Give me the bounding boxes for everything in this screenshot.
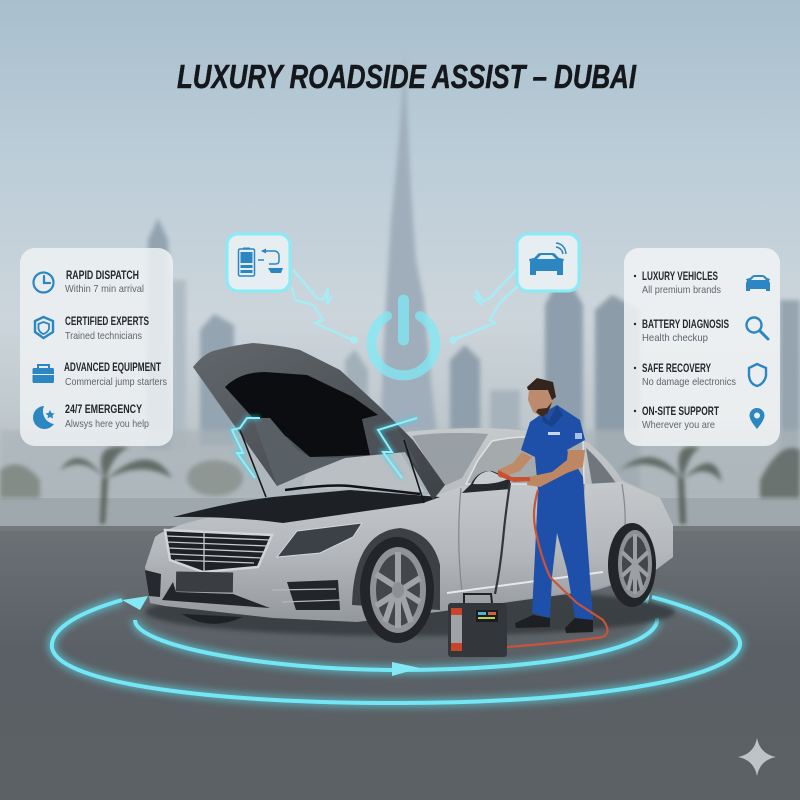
- technician: left shoe: [515, 615, 550, 628]
- technician: [498, 378, 593, 633]
- item: advanced equipment: [64, 360, 167, 388]
- item: emergency: [65, 402, 149, 430]
- car: windshield behind hood: [300, 452, 425, 492]
- glowing ring: inner track: [135, 618, 657, 670]
- car: side trim: [447, 572, 603, 593]
- icon: map pin: [750, 408, 765, 429]
- car: rear side window: [586, 448, 616, 484]
- car: body lower panel: [145, 482, 673, 622]
- lightning connector: left: [292, 270, 356, 342]
- title: LUXURY ROADSIDE ASSIST – DUBAI: [177, 58, 637, 95]
- item: certified experts: Trained technicians: [65, 330, 142, 342]
- car: grille: [165, 530, 272, 572]
- icon: magnifier: [746, 318, 768, 339]
- technician: sleeve badge: [575, 433, 582, 439]
- car: front side window: [466, 437, 584, 484]
- car: door seams: [459, 484, 625, 592]
- item: certified experts: [65, 314, 149, 342]
- technician: clamps: [498, 470, 530, 482]
- item: on-site support: [642, 404, 719, 431]
- item: luxury vehicles: All premium brands: [642, 284, 721, 296]
- icon: shield: [749, 364, 766, 386]
- hood: insulation right: [362, 419, 420, 470]
- hood: dark inner panel: [225, 372, 378, 457]
- car: open hood: [193, 343, 445, 503]
- car: rear wheel: [608, 523, 656, 607]
- item: luxury vehicles: [642, 269, 721, 296]
- technician: hair: [527, 378, 556, 400]
- car: front underside: [182, 614, 243, 624]
- item: advanced equipment: ADVANCED EQUIPMENT: [64, 360, 161, 374]
- technician: right shoe: [565, 618, 593, 633]
- bullets: [634, 275, 636, 412]
- background: road: [0, 528, 800, 800]
- icon: connected car tile: [517, 234, 579, 291]
- lightning connector: right: [450, 270, 518, 342]
- item: rapid dispatch: RAPID DISPATCH: [66, 268, 139, 282]
- car: side mirror: [462, 471, 510, 493]
- jump starter: side stripe: [451, 608, 462, 650]
- background: water strip: [0, 498, 800, 528]
- item: emergency: 24/7 EMERGENCY: [65, 402, 142, 416]
- item: safe recovery: No damage electronics: [642, 376, 736, 388]
- item: safe recovery: [642, 361, 736, 388]
- car: front wheel: [352, 528, 440, 643]
- black jump cable: [495, 483, 510, 594]
- red jump cable: [507, 490, 608, 647]
- gemini sparkle mark: [738, 738, 776, 776]
- item: luxury vehicles: LUXURY VEHICLES: [642, 269, 718, 283]
- item: battery diagnosis: BATTERY DIAGNOSIS: [642, 317, 729, 331]
- icon: toolbox: [32, 365, 54, 383]
- item: battery diagnosis: Health checkup: [642, 332, 708, 344]
- item: certified experts: CERTIFIED EXPERTS: [65, 314, 149, 328]
- car: fog vent slats: [272, 589, 340, 602]
- technician: near arm: [527, 450, 585, 487]
- jump starter: display: [476, 610, 498, 622]
- icon: battery tile: [227, 234, 290, 291]
- car: headlight: [277, 523, 362, 557]
- item: emergency: Alwsys here you help: [65, 418, 149, 430]
- car: mirror cap: [473, 471, 508, 484]
- left feature panel: [20, 248, 173, 446]
- glowing ring: outer glow: [52, 597, 740, 703]
- battery jump starter: [448, 594, 507, 657]
- technician: collar: [541, 405, 563, 427]
- hood: insulation left: [253, 418, 345, 486]
- icon: moon and star: [33, 406, 54, 429]
- background: sky: [0, 0, 800, 530]
- icon: certified shield: [35, 317, 53, 338]
- technician: chest logo: [548, 432, 560, 435]
- icon: clock: [34, 272, 54, 292]
- lightning: hood right: [378, 418, 417, 478]
- lightning: hood left: [232, 418, 260, 478]
- technician: coverall: [521, 405, 593, 620]
- hood: struts: [240, 430, 424, 503]
- car: [145, 343, 675, 643]
- technician: far arm: [498, 452, 532, 478]
- item: rapid dispatch: Within 7 min arrival: [65, 283, 144, 295]
- glowing ring: arrowheads: [122, 592, 650, 676]
- car: roof and rear body: [405, 428, 673, 612]
- car: number plate: [176, 571, 233, 592]
- car: left fog vent: [145, 570, 161, 597]
- item: battery diagnosis: [642, 317, 729, 344]
- background: right palm trees: [620, 447, 800, 524]
- glowing ring: outer track: [52, 597, 740, 703]
- background: left palm trees: [0, 447, 243, 524]
- item: advanced equipment: Commercial jump starters: [65, 376, 167, 388]
- technician: face: [528, 388, 553, 417]
- item: rapid dispatch: [65, 268, 144, 295]
- technician: beard: [536, 402, 552, 417]
- item: on-site support: Wherever you are: [642, 419, 715, 431]
- car: right fog vent: [287, 580, 340, 610]
- car: windshield: [412, 433, 488, 486]
- icon: power symbol: [372, 300, 436, 375]
- icon: car: [746, 275, 770, 291]
- car: engine bay: [173, 490, 440, 523]
- car: ground shadow: [145, 588, 675, 636]
- item: safe recovery: SAFE RECOVERY: [642, 361, 711, 375]
- item: on-site support: ON-SITE SUPPORT: [642, 404, 719, 418]
- car: lower intake: [162, 582, 270, 608]
- right feature panel: [624, 248, 780, 446]
- car: wipers: [285, 486, 420, 494]
- background: Dubai skyline: [0, 48, 800, 500]
